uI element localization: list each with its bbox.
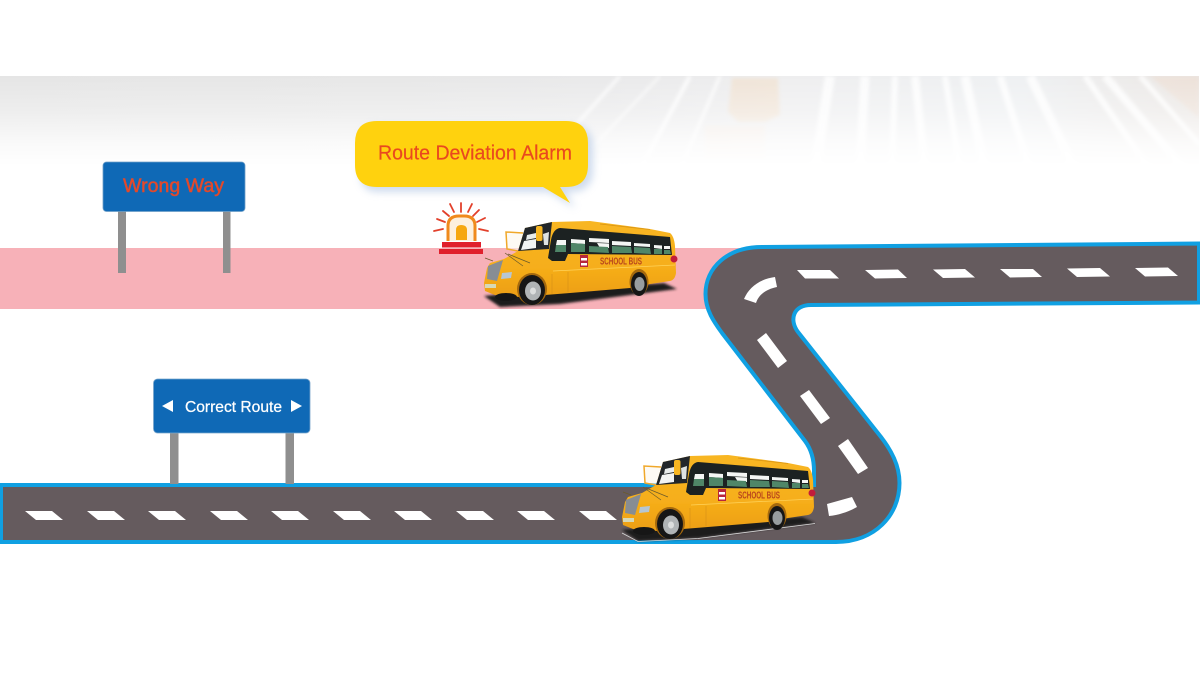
callout shadow [360,125,593,208]
side mirror [536,226,542,241]
background photo strip: blurred highway light streaks [0,76,1199,138]
grille [487,260,503,281]
wheels [517,273,547,305]
sign posts [118,211,230,273]
window panes [694,472,808,483]
window band [548,228,672,261]
beacon dome [448,216,475,241]
windshield [656,456,690,485]
callout bubble [355,121,588,203]
window panes [556,238,670,249]
school emblem [718,489,726,501]
rear light [670,256,678,262]
beacon light [456,225,467,240]
beacon base [439,242,483,254]
bus shadow [622,517,815,541]
windshield [518,222,552,251]
sign posts [170,433,294,484]
wheels [655,507,685,539]
sign text: Correct Route [185,399,282,416]
sign: correct route [154,379,310,484]
sign: wrong way [103,162,245,273]
bus lettering: SCHOOL BUS [738,490,780,502]
headlights [639,506,650,513]
beacon rays [434,203,488,231]
sign text: Wrong Way [123,176,225,197]
road: correct route with blue edge [1,244,1199,542]
icon: alarm beacon [434,203,488,254]
far front wheel [495,293,517,301]
callout text: Route Deviation Alarm [378,142,572,164]
bus body [484,221,678,305]
door mirror frame [506,232,523,251]
right arrow [291,400,302,412]
callout: route deviation alarm [355,121,593,208]
school bus: deviated position [484,221,678,307]
window band [686,462,810,495]
pink wrong-way road band [0,248,740,309]
road surface [1,244,1199,542]
sign board [103,162,245,212]
rear light [808,490,816,496]
school emblem [580,255,588,267]
left arrow [162,400,173,412]
bus body [622,455,816,539]
grille [625,494,641,515]
far front wheel [633,527,655,535]
headlights [501,272,512,279]
sign board [154,379,310,433]
bus shadow [484,283,677,307]
side mirror [674,460,680,475]
school bus: correct route position [622,455,816,542]
bus lettering: SCHOOL BUS [600,256,642,268]
lane markings [25,268,1178,520]
door mirror frame [644,466,661,485]
